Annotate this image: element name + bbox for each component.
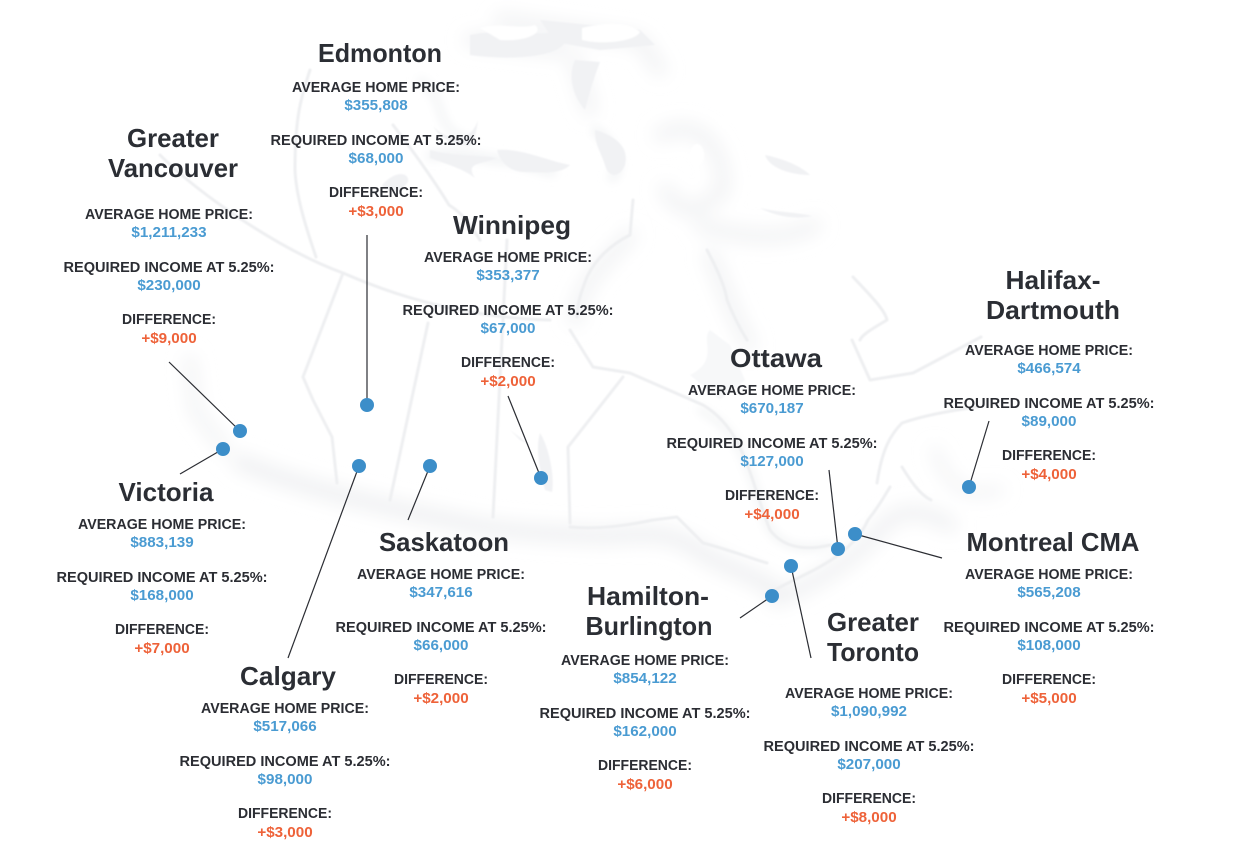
stats: Greater Toronto: DIFFERENCE: [822, 791, 916, 807]
stats: Hamilton-Burlington: +$6,000 [617, 776, 673, 793]
city: Greater Toronto [764, 559, 974, 826]
stats: Saskatoon: +$2,000 [413, 690, 469, 707]
stats: Greater Toronto: AVERAGE HOME PRICE: [785, 686, 953, 702]
stats: Saskatoon: AVERAGE HOME PRICE: [357, 567, 525, 583]
stats: Edmonton: $355,808 [344, 97, 408, 114]
marker: Ottawa [829, 470, 845, 556]
stats: Edmonton: REQUIRED INCOME AT 5.25%: [270, 133, 482, 149]
city: Hamilton-Burlington [540, 581, 779, 793]
stats: Saskatoon [336, 567, 546, 707]
marker: Winnipeg [508, 396, 548, 485]
heading: Montreal CMA: Montreal CMA [966, 527, 1140, 557]
stats: Greater Toronto: REQUIRED INCOME AT 5.25%: [764, 739, 974, 755]
heading: Hamilton-Burlington: Hamilton- [587, 581, 709, 611]
stats: Victoria: AVERAGE HOME PRICE: [78, 517, 246, 533]
stats: Hamilton-Burlington [540, 653, 750, 793]
stats: Winnipeg: $67,000 [481, 320, 535, 337]
stats: Greater Vancouver: REQUIRED INCOME AT 5.25%: [64, 260, 274, 276]
city: Greater Vancouver [64, 123, 274, 438]
stats: Winnipeg: AVERAGE HOME PRICE: [424, 250, 592, 266]
stats: Greater Vancouver: DIFFERENCE: [122, 312, 216, 328]
heading: Ottawa: Ottawa [730, 343, 823, 373]
marker: Saskatoon [408, 459, 437, 520]
stats: Winnipeg: +$2,000 [480, 373, 536, 390]
stats: Winnipeg [402, 250, 614, 390]
stats: Edmonton: $68,000 [349, 150, 403, 167]
marker: Greater Vancouver [169, 362, 247, 438]
stats: Montreal CMA: $565,208 [1017, 584, 1081, 601]
stats: Calgary [180, 701, 390, 841]
marker: Montreal CMA [848, 527, 942, 558]
city: Calgary [180, 459, 390, 841]
marker: Victoria [180, 442, 230, 474]
stats: Calgary: +$3,000 [257, 824, 313, 841]
heading: Hamilton-Burlington [586, 581, 712, 641]
marker: Halifax-Dartmouth [962, 421, 989, 494]
stats: Winnipeg: DIFFERENCE: [461, 355, 555, 371]
stats: Ottawa: DIFFERENCE: [725, 488, 819, 504]
stats: Halifax-Dartmouth: $89,000 [1022, 413, 1076, 430]
heading: Victoria: Victoria [118, 477, 214, 507]
stats: Calgary: $98,000 [258, 771, 312, 788]
stats: Halifax-Dartmouth: REQUIRED INCOME AT 5.25%: [944, 396, 1154, 412]
stats: Edmonton: AVERAGE HOME PRICE: [292, 80, 460, 96]
stats: Greater Toronto: $207,000 [837, 756, 901, 773]
city: Saskatoon [336, 459, 546, 707]
heading: Saskatoon: Saskatoon [379, 527, 509, 557]
stats: Montreal CMA: AVERAGE HOME PRICE: [965, 567, 1133, 583]
stats: Ottawa: REQUIRED INCOME AT 5.25%: [666, 436, 878, 452]
stats: Montreal CMA: DIFFERENCE: [1002, 672, 1096, 688]
stats: Hamilton-Burlington: REQUIRED INCOME AT 5.25%: [540, 706, 750, 722]
stats: Greater Vancouver [64, 207, 274, 347]
city: Montreal CMA [848, 527, 1154, 707]
stats: Victoria: +$7,000 [134, 640, 190, 657]
heading: Halifax-Dartmouth: Halifax- [1006, 265, 1100, 295]
stats: Winnipeg: REQUIRED INCOME AT 5.25%: [402, 303, 614, 319]
stats: Ottawa: +$4,000 [744, 506, 800, 523]
stats: Montreal CMA: REQUIRED INCOME AT 5.25%: [944, 620, 1154, 636]
heading: Greater Vancouver [108, 123, 238, 183]
stats: Calgary: REQUIRED INCOME AT 5.25%: [180, 754, 390, 770]
stats: Greater Vancouver: +$9,000 [141, 330, 197, 347]
heading: Greater Toronto [827, 607, 919, 667]
stats: Greater Toronto [764, 686, 974, 826]
background map of Canada [160, 20, 1000, 600]
city: Victoria [56, 442, 268, 657]
stats: Calgary: AVERAGE HOME PRICE: [201, 701, 369, 717]
stats: Greater Vancouver: $1,211,233 [131, 224, 207, 241]
stats: Saskatoon: REQUIRED INCOME AT 5.25%: [336, 620, 546, 636]
stats: Halifax-Dartmouth [944, 343, 1154, 483]
stats: Victoria: REQUIRED INCOME AT 5.25%: [56, 570, 268, 586]
heading: Winnipeg: Winnipeg [453, 210, 571, 240]
heading: Halifax-Dartmouth [986, 265, 1120, 325]
stats: Winnipeg: $353,377 [476, 267, 540, 284]
stats: Victoria: $168,000 [130, 587, 194, 604]
stats: Edmonton [270, 80, 482, 220]
stats: Hamilton-Burlington: $854,122 [613, 670, 677, 687]
marker: Hamilton-Burlington [740, 589, 779, 618]
stats: Hamilton-Burlington: DIFFERENCE: [598, 758, 692, 774]
stats: Edmonton: DIFFERENCE: [329, 185, 423, 201]
heading: Halifax-Dartmouth: Dartmouth [986, 295, 1120, 325]
stats: Ottawa: AVERAGE HOME PRICE: [688, 383, 856, 399]
city: Winnipeg [402, 210, 614, 485]
stats: Halifax-Dartmouth: +$4,000 [1021, 466, 1077, 483]
city: Halifax-Dartmouth [944, 265, 1154, 494]
stats: Ottawa: $127,000 [740, 453, 804, 470]
heading: Edmonton: Edmonton [318, 38, 442, 68]
city: Edmonton [270, 38, 482, 412]
stats: Ottawa: $670,187 [740, 400, 804, 417]
heading: Calgary: Calgary [240, 661, 337, 691]
stats: Montreal CMA: +$5,000 [1021, 690, 1077, 707]
stats: Saskatoon: $347,616 [409, 584, 473, 601]
stats: Greater Vancouver: $230,000 [137, 277, 201, 294]
heading: Greater Vancouver: Vancouver [108, 153, 238, 183]
marker: Calgary [288, 459, 366, 658]
stats: Victoria [56, 517, 268, 657]
stats: Victoria: $883,139 [130, 534, 194, 551]
marker: Greater Toronto [784, 559, 811, 658]
stats: Edmonton: +$3,000 [348, 203, 404, 220]
stats: Ottawa [666, 383, 878, 523]
stats: Calgary: $517,066 [253, 718, 317, 735]
stats: Greater Toronto: $1,090,992 [831, 703, 907, 720]
stats: Greater Vancouver: AVERAGE HOME PRICE: [85, 207, 253, 223]
stats: Saskatoon: DIFFERENCE: [394, 672, 488, 688]
heading: Greater Toronto: Greater [827, 607, 919, 637]
heading: Greater Vancouver: Greater [127, 123, 219, 153]
stats: Hamilton-Burlington: $162,000 [613, 723, 677, 740]
marker: Edmonton [360, 235, 374, 412]
stats: Saskatoon: $66,000 [414, 637, 468, 654]
stats: Montreal CMA: $108,000 [1017, 637, 1081, 654]
stats: Montreal CMA [944, 567, 1154, 707]
white lakes and islands over the shading [480, 24, 704, 166]
stats: Halifax-Dartmouth: $466,574 [1017, 360, 1081, 377]
stats: Halifax-Dartmouth: DIFFERENCE: [1002, 448, 1096, 464]
stats: Halifax-Dartmouth: AVERAGE HOME PRICE: [965, 343, 1133, 359]
city: Ottawa [666, 343, 878, 556]
heading: Hamilton-Burlington: Burlington [586, 611, 712, 641]
stats: Victoria: DIFFERENCE: [115, 622, 209, 638]
heading: Greater Toronto: Toronto [827, 637, 919, 667]
stats: Hamilton-Burlington: AVERAGE HOME PRICE: [561, 653, 729, 669]
stats: Calgary: DIFFERENCE: [238, 806, 332, 822]
stats: Greater Toronto: +$8,000 [841, 809, 897, 826]
